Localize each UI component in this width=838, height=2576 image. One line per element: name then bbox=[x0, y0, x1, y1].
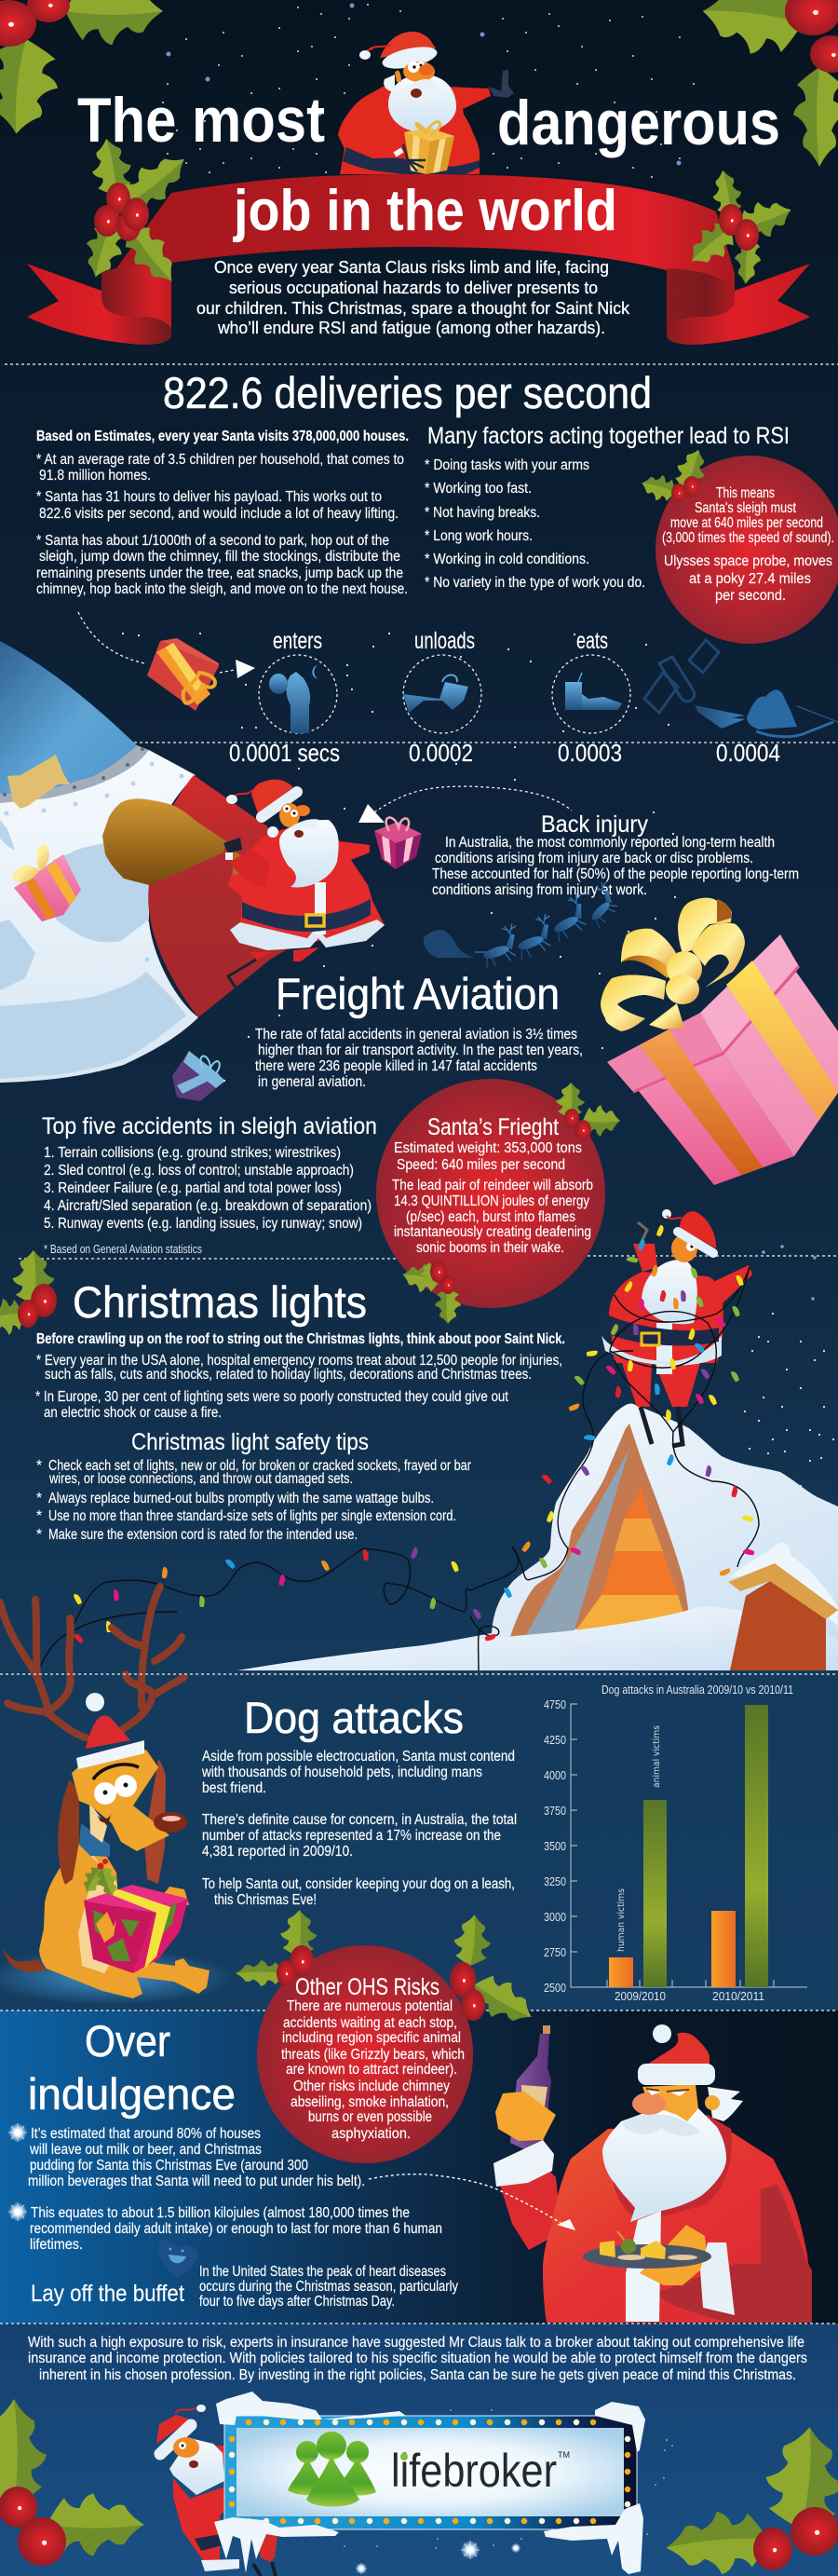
bar chart: 4000 bbox=[544, 1768, 566, 1782]
fur trim bbox=[626, 2211, 661, 2322]
callout: other OHS risks: are known to attract reindeer). bbox=[286, 2062, 457, 2078]
list: safety tips: * bbox=[36, 1527, 42, 1543]
bar chart: 3500 bbox=[544, 1839, 566, 1853]
list: top five accidents: 4. Aircraft/Sled separation (e.g. breakdown of separation) bbox=[44, 1198, 372, 1214]
step: eats: eats bbox=[576, 628, 608, 654]
dog hat bbox=[76, 1693, 144, 1769]
light bulbs bbox=[73, 1224, 755, 1644]
callout: other OHS risks: There are numerous potential bbox=[287, 1998, 453, 2014]
logo sign bbox=[214, 2392, 645, 2574]
step: eats bbox=[552, 628, 630, 733]
step: unloads: unloads bbox=[414, 628, 475, 654]
panel: dog attacks bbox=[0, 1683, 807, 2005]
icon: sleigh silhouette bbox=[695, 689, 838, 737]
ribbon band bbox=[116, 174, 735, 307]
timeline values bbox=[229, 739, 780, 767]
bar chart: human victims bbox=[616, 1888, 627, 1952]
panel: closing text bbox=[28, 2335, 807, 2383]
tail bbox=[2, 1949, 47, 1972]
heading: safety tips: Christmas light safety tips bbox=[131, 1429, 369, 1455]
text block: beverages: will leave out milk or beer, and Christmas bbox=[29, 2142, 262, 2158]
body text: These accounted for half (50%) of the people reporting long-term bbox=[432, 866, 799, 882]
ribbon left fold bbox=[101, 263, 171, 329]
trademark: TM bbox=[558, 2450, 570, 2460]
panel: big pink gift bbox=[601, 898, 838, 1185]
beard bbox=[602, 2108, 726, 2222]
lid right face bbox=[700, 934, 799, 1053]
intro text bbox=[196, 257, 630, 337]
ribbon title: job in the world bbox=[233, 179, 617, 243]
callout: Santa's Frieght: Santa’s Frieght bbox=[427, 1114, 559, 1140]
pale shadows bbox=[0, 820, 186, 1079]
body text: conditions arising from injury at work. bbox=[432, 882, 647, 898]
text block: estimates: remaining presents under the tree, eat snacks, jump back up the bbox=[36, 566, 403, 581]
boots bbox=[228, 960, 291, 988]
body text: in general aviation. bbox=[258, 1074, 366, 1090]
list: RSI factors: * Doing tasks with your arms bbox=[425, 457, 589, 473]
body text: such as falls, cuts and shocks, related to holiday lights, decorations and Christmas trees. bbox=[45, 1367, 532, 1383]
hat bbox=[645, 2033, 710, 2065]
sign frame bbox=[224, 2416, 637, 2529]
ribbon left tail bbox=[27, 264, 171, 345]
coat collar shade bbox=[612, 2115, 732, 2217]
list: safety tips: Use no more than three standard-size sets of lights per single extension cord. bbox=[48, 1508, 456, 1524]
bar chart: animal victims bbox=[652, 1725, 662, 1788]
body text: conditions arising from injury are back or disc problems. bbox=[435, 851, 753, 866]
gift held bbox=[374, 817, 422, 869]
step: unloads bbox=[403, 628, 481, 733]
arrow: dashed path to gift bbox=[78, 612, 255, 678]
callout: Santa's Frieght: sonic booms in their wake. bbox=[416, 1240, 564, 1256]
illustration: moon ball with santa bbox=[0, 641, 572, 1101]
scroll bbox=[7, 755, 70, 809]
legs bbox=[256, 2534, 277, 2562]
panel: over indulgence bbox=[8, 2016, 575, 2310]
pink gift on ball bbox=[12, 844, 81, 921]
panel: christmas lights bbox=[0, 1209, 838, 1674]
text block: heart disease: four to five days after Christmas Day. bbox=[199, 2294, 395, 2310]
text block: estimates: 91.8 million homes. bbox=[39, 468, 151, 484]
callout: Santa's Frieght: (p/sec) each, burst into flames bbox=[406, 1209, 575, 1225]
illustration: dog with gift bbox=[2, 1693, 210, 1998]
list: RSI factors bbox=[425, 457, 645, 591]
text block: beverages bbox=[28, 2126, 365, 2189]
heading: RSI factors: Many factors acting together lead to RSI bbox=[427, 423, 790, 449]
callout: sleigh speed: This means bbox=[716, 485, 775, 501]
sack neck and glove bbox=[223, 838, 256, 876]
body text: number of attacks represented a 17% increase on the bbox=[202, 1828, 501, 1844]
santa hand and cuff bbox=[493, 2092, 556, 2187]
heading: 822.6 deliveries per second bbox=[163, 368, 652, 417]
holly bottom right bbox=[663, 2424, 838, 2576]
logo dot bbox=[400, 2453, 408, 2460]
coat shade bbox=[658, 2185, 812, 2323]
plate of food bbox=[583, 2225, 735, 2315]
list: safety tips: * bbox=[36, 1458, 42, 1474]
timeline values: 0.0003 bbox=[558, 739, 622, 767]
panel: freight aviation bbox=[42, 969, 583, 1256]
arm shade bbox=[230, 850, 270, 887]
legs bbox=[250, 947, 319, 961]
starfield bbox=[163, 5, 708, 177]
text block: heart disease bbox=[199, 2264, 458, 2310]
heading: Freight Aviation bbox=[276, 969, 560, 1018]
body text: * Every year in the USA alone, hospital emergency rooms treat about 12,500 people for injuries, bbox=[36, 1353, 562, 1369]
light wires bbox=[37, 1267, 759, 1674]
mustache bbox=[622, 2115, 700, 2136]
purple gift bbox=[172, 1051, 225, 1101]
sky stars bbox=[745, 1314, 833, 1486]
santa hat bbox=[226, 780, 319, 838]
bar chart: 2009/2010 bbox=[615, 1989, 666, 2003]
yellow band bbox=[726, 961, 838, 1120]
collar bbox=[79, 1823, 110, 1857]
callout: other OHS risks: abseiling, smoke inhalation, bbox=[291, 2094, 449, 2110]
illustration: antlers upper bbox=[0, 1587, 184, 1738]
step: enters bbox=[259, 628, 337, 733]
title line 1: The most bbox=[77, 85, 325, 156]
heading: Over bbox=[85, 2016, 170, 2065]
dog body bbox=[39, 1842, 210, 1998]
body text bbox=[432, 835, 799, 898]
right ear bbox=[144, 1759, 166, 1884]
body text bbox=[201, 1749, 517, 1908]
heading: top five: Top five accidents in sleigh aviation bbox=[42, 1113, 377, 1139]
list: safety tips bbox=[36, 1458, 471, 1543]
bar chart: 3250 bbox=[544, 1874, 566, 1888]
text block: estimates: * Santa has about 1/1000th of a second to park, hop out of the bbox=[36, 533, 389, 549]
callout: sleigh speed: per second. bbox=[715, 588, 786, 604]
timeline values: 0.0004 bbox=[716, 739, 780, 767]
pointing hand bbox=[253, 2467, 276, 2482]
body text: There’s definite cause for concern, in Australia, the total bbox=[202, 1812, 517, 1828]
coat trim bbox=[230, 920, 385, 950]
illustration: santa with wine bbox=[493, 2024, 812, 2323]
blue dome bbox=[0, 641, 137, 794]
illustration: santa pointing bbox=[156, 2405, 277, 2576]
sparkles and stars bottom bbox=[345, 2410, 672, 2574]
callout: Santa's Frieght: Estimated weight: 353,000 tons bbox=[394, 1140, 582, 1156]
santa beard bbox=[279, 820, 339, 888]
wine bottle bbox=[510, 2025, 551, 2149]
callout: other OHS risks: threats (like Grizzly bears, which bbox=[281, 2047, 465, 2063]
body text: there were 236 people killed in 147 fatal accidents bbox=[255, 1058, 537, 1074]
callout: sleigh speed bbox=[639, 444, 838, 644]
text block: kilojules: recommended daily adult intake) or enough to last for more than 6 human bbox=[30, 2221, 442, 2237]
nose bbox=[154, 1812, 187, 1833]
panel: back injury bbox=[224, 809, 799, 1081]
intro text: our children. This Christmas, spare a thought for Saint Nick bbox=[196, 298, 630, 318]
arrow: back injury bbox=[358, 786, 572, 823]
heading: Christmas lights bbox=[73, 1277, 367, 1327]
body text: Aside from possible electrocuation, Santa must contend bbox=[202, 1749, 515, 1765]
bar chart: 4250 bbox=[544, 1733, 566, 1747]
text block: kilojules: This equates to about 1.5 billion kilojules (almost 180,000 times the bbox=[31, 2205, 410, 2221]
red crescent bbox=[148, 775, 317, 1017]
illustration: reindeer and sleigh silhouette bbox=[424, 880, 626, 969]
hair bbox=[708, 2087, 743, 2121]
panel: over indulgence background bbox=[0, 2010, 838, 2324]
heading: Back injury bbox=[541, 811, 648, 838]
gift back paws bbox=[158, 1887, 189, 1905]
callout: Santa's Frieght: 14.3 QUINTILLION joules of energy bbox=[394, 1193, 589, 1209]
gift bow bbox=[601, 898, 745, 1031]
body text: this Chrismas Eve! bbox=[214, 1892, 317, 1908]
orange band bbox=[640, 1029, 763, 1175]
bar chart bbox=[544, 1683, 807, 2003]
list: RSI factors: * Long work hours. bbox=[425, 528, 533, 544]
holly top right bbox=[698, 0, 838, 167]
illustration: snowy roof bbox=[237, 1404, 838, 1670]
text block: estimates: * Santa has 31 hours to deliver his payload. This works out to bbox=[36, 489, 382, 505]
list: RSI factors: * Not having breaks. bbox=[425, 505, 540, 521]
body text: with thousands of household pets, including mans bbox=[201, 1765, 482, 1780]
icon: striped gift bbox=[147, 638, 219, 711]
list: RSI factors: * Working in cold conditions. bbox=[425, 552, 589, 567]
panel: title header bbox=[0, 0, 838, 345]
coat bbox=[543, 2127, 812, 2323]
list: top five accidents: * Based on General Aviation statistics bbox=[44, 1242, 202, 1256]
holly left bbox=[0, 1250, 57, 1338]
callout: other OHS risks: Other OHS Risks bbox=[295, 1974, 439, 2000]
bar chart: Dog attacks in Australia 2009/10 vs 2010/11 bbox=[601, 1683, 793, 1697]
illustration: santa with gift bbox=[338, 32, 514, 174]
list: RSI factors: * Working too fast. bbox=[425, 481, 532, 497]
bar chart: 2010/2011 bbox=[712, 1989, 764, 2003]
holly sprig bbox=[77, 1859, 122, 1900]
callout: other OHS risks: Other risks include chimney bbox=[293, 2079, 450, 2094]
intro text: Once every year Santa Claus risks limb and life, facing bbox=[214, 257, 609, 277]
list: top five accidents bbox=[44, 1145, 372, 1256]
callout: Santa's Frieght: The lead pair of reindeer will absorb bbox=[392, 1178, 593, 1193]
holly right of ribbon bbox=[681, 168, 797, 285]
bar chart: 3750 bbox=[544, 1804, 566, 1818]
text block: estimates: Based on Estimates, every year Santa visits 378,000,000 houses. bbox=[36, 429, 409, 444]
coat bbox=[173, 2446, 254, 2562]
list: safety tips: Check each set of lights, new or old, for broken or cracked sockets, frayed or bar bbox=[48, 1458, 471, 1474]
heading bbox=[28, 2016, 236, 2119]
lid left face bbox=[607, 1013, 723, 1092]
list: safety tips: * bbox=[36, 1508, 42, 1524]
step: enters: enters bbox=[273, 628, 322, 654]
text block: estimates: 822.6 visits per second, and would include a lot of heavy lifting. bbox=[39, 506, 399, 522]
text block: beverages: It’s estimated that around 80% of houses bbox=[31, 2126, 261, 2142]
icon: heart bbox=[158, 2239, 197, 2277]
heading: Dog attacks bbox=[244, 1693, 464, 1742]
body text: higher than for air transport activity. In the past ten years, bbox=[258, 1043, 583, 1058]
text block: heart disease: In the United States the peak of heart diseases bbox=[199, 2264, 446, 2280]
heading: lay off the buffet: Lay off the buffet bbox=[31, 2281, 184, 2307]
icon: satellite bbox=[644, 640, 719, 713]
body text: 4,381 reported in 2009/10. bbox=[202, 1844, 353, 1860]
list: RSI factors: * No variety in the type of work you do. bbox=[425, 575, 645, 591]
ribbon right fold bbox=[667, 268, 735, 329]
snow on sign bbox=[216, 2392, 645, 2452]
sack bbox=[102, 798, 226, 885]
heading: indulgence bbox=[28, 2069, 236, 2119]
panel: deliveries per second bbox=[36, 368, 838, 780]
list: top five accidents: 3. Reindeer Failure (e.g. partial and total power loss) bbox=[44, 1180, 342, 1196]
body right face bbox=[723, 972, 838, 1156]
text block: estimates: sleigh, jump down the chimney, fill the stockings, distribute the bbox=[39, 549, 400, 565]
illustration: chimney bbox=[728, 1543, 838, 1670]
list: safety tips: * bbox=[36, 1491, 42, 1506]
body text: To help Santa out, consider keeping your dog on a leash, bbox=[202, 1876, 515, 1892]
logo wordmark: lifebroker bbox=[391, 2445, 557, 2497]
sign panel bbox=[237, 2428, 624, 2516]
callout: other OHS risks: accidents waiting at each stop, bbox=[283, 2015, 457, 2031]
callout: other OHS risks bbox=[236, 1909, 541, 2163]
bar chart: 3000 bbox=[544, 1910, 566, 1924]
left ear bbox=[58, 1779, 79, 1885]
body text: In Australia, the most commonly reported long-term health bbox=[445, 835, 775, 851]
text block: estimates bbox=[36, 429, 409, 597]
list: top five accidents: 1. Terrain collisions (e.g. ground strikes; wirestrikes) bbox=[44, 1145, 341, 1161]
body text: * In Europe, 30 per cent of lighting sets were so poorly constructed they could give out bbox=[35, 1389, 509, 1405]
intro text: serious occupational hazards to deliver presents to bbox=[229, 278, 598, 297]
callout: other OHS risks: burns or even possible bbox=[308, 2109, 432, 2125]
ribbon right tail bbox=[667, 264, 810, 345]
timeline values: 0.0002 bbox=[409, 739, 473, 767]
head bbox=[72, 1750, 169, 1851]
body text: Before crawling up on the roof to string out the Christmas lights, think about poor Saint Nick. bbox=[36, 1331, 565, 1347]
body text bbox=[255, 1027, 583, 1090]
list: safety tips: Make sure the extension cord is rated for the intended use. bbox=[48, 1527, 358, 1543]
intro text: who’ll endure RSI and fatigue (among other hazards). bbox=[217, 318, 605, 337]
icon: sparkle one bbox=[8, 2123, 27, 2142]
rivets bbox=[7, 764, 182, 1001]
timeline values: 0.0001 secs bbox=[229, 739, 340, 767]
callout: Santa's Frieght: instantaneously creating deafening bbox=[394, 1224, 591, 1240]
callout: sleigh speed: at a poky 27.4 miles bbox=[689, 571, 811, 587]
holly bottom left bbox=[0, 2399, 144, 2566]
eyes and brow bbox=[93, 1765, 139, 1824]
beard bbox=[169, 2438, 224, 2495]
raised arm bbox=[500, 2171, 559, 2250]
callout: sleigh speed: Santa's sleigh must bbox=[695, 500, 797, 516]
text block: estimates: chimney, hop back into the sleigh, and move on to the next house. bbox=[36, 581, 408, 597]
body text: best friend. bbox=[202, 1780, 266, 1796]
sign bulbs white bbox=[232, 2422, 628, 2521]
white ball bbox=[0, 750, 198, 1083]
list: top five accidents: 5. Runway events (e.g. landing issues, icy runway; snow) bbox=[44, 1216, 362, 1232]
body text bbox=[35, 1331, 565, 1421]
body left face bbox=[638, 1055, 794, 1185]
icon: sparkle two bbox=[8, 2202, 27, 2221]
body text: The rate of fatal accidents in general aviation is 3½ times bbox=[255, 1027, 577, 1043]
bar chart: 4750 bbox=[544, 1697, 566, 1711]
sign bulbs gold bbox=[232, 2422, 628, 2521]
list: top five accidents: 2. Sled control (e.g. loss of control; unstable approach) bbox=[44, 1163, 354, 1179]
santa coat bbox=[228, 820, 385, 950]
callout: Santa's Frieght: Speed: 640 miles per second bbox=[397, 1157, 565, 1173]
text block: kilojules bbox=[30, 2205, 442, 2253]
title line 2: dangerous bbox=[497, 88, 780, 158]
chest bbox=[78, 1845, 121, 1973]
callout: other OHS risks: asphyxiation. bbox=[331, 2126, 411, 2142]
text block: estimates: * At an average rate of 3.5 children per household, that comes to bbox=[36, 452, 404, 468]
logo pawns bbox=[288, 2432, 376, 2507]
stars bbox=[123, 634, 669, 780]
text block: beverages: pudding for Santa this Christmas Eve (around 300 bbox=[30, 2158, 308, 2174]
body text: an electric shock or cause a fire. bbox=[44, 1405, 222, 1421]
list: safety tips: wires, or loose connections, and throw out damaged sets. bbox=[48, 1471, 353, 1487]
bar chart: 2750 bbox=[544, 1945, 566, 1959]
grey band bbox=[0, 745, 149, 803]
text block: kilojules: lifetimes. bbox=[30, 2237, 83, 2253]
hat and face bbox=[156, 2405, 206, 2468]
holly top left bbox=[0, 0, 163, 138]
text block: beverages: million beverages that Santa will need to put under his belt). bbox=[28, 2174, 365, 2189]
callout: other OHS risks: including region specific animal bbox=[282, 2030, 461, 2046]
bar chart: 2500 bbox=[544, 1981, 566, 1995]
list: safety tips: Always replace burned-out bulbs promptly with the same wattage bulbs. bbox=[48, 1491, 434, 1506]
face bbox=[642, 2084, 698, 2121]
callout: Santa's Frieght bbox=[376, 1079, 620, 1324]
arrow: to plate bbox=[369, 2174, 575, 2230]
holly left of ribbon bbox=[78, 135, 196, 293]
text block: heart disease: occurs during the Christmas season, particularly bbox=[199, 2279, 458, 2295]
gift bbox=[84, 1885, 188, 1973]
illustration: tangled santa bbox=[601, 1209, 752, 1446]
dog shadow bbox=[0, 1949, 235, 2005]
